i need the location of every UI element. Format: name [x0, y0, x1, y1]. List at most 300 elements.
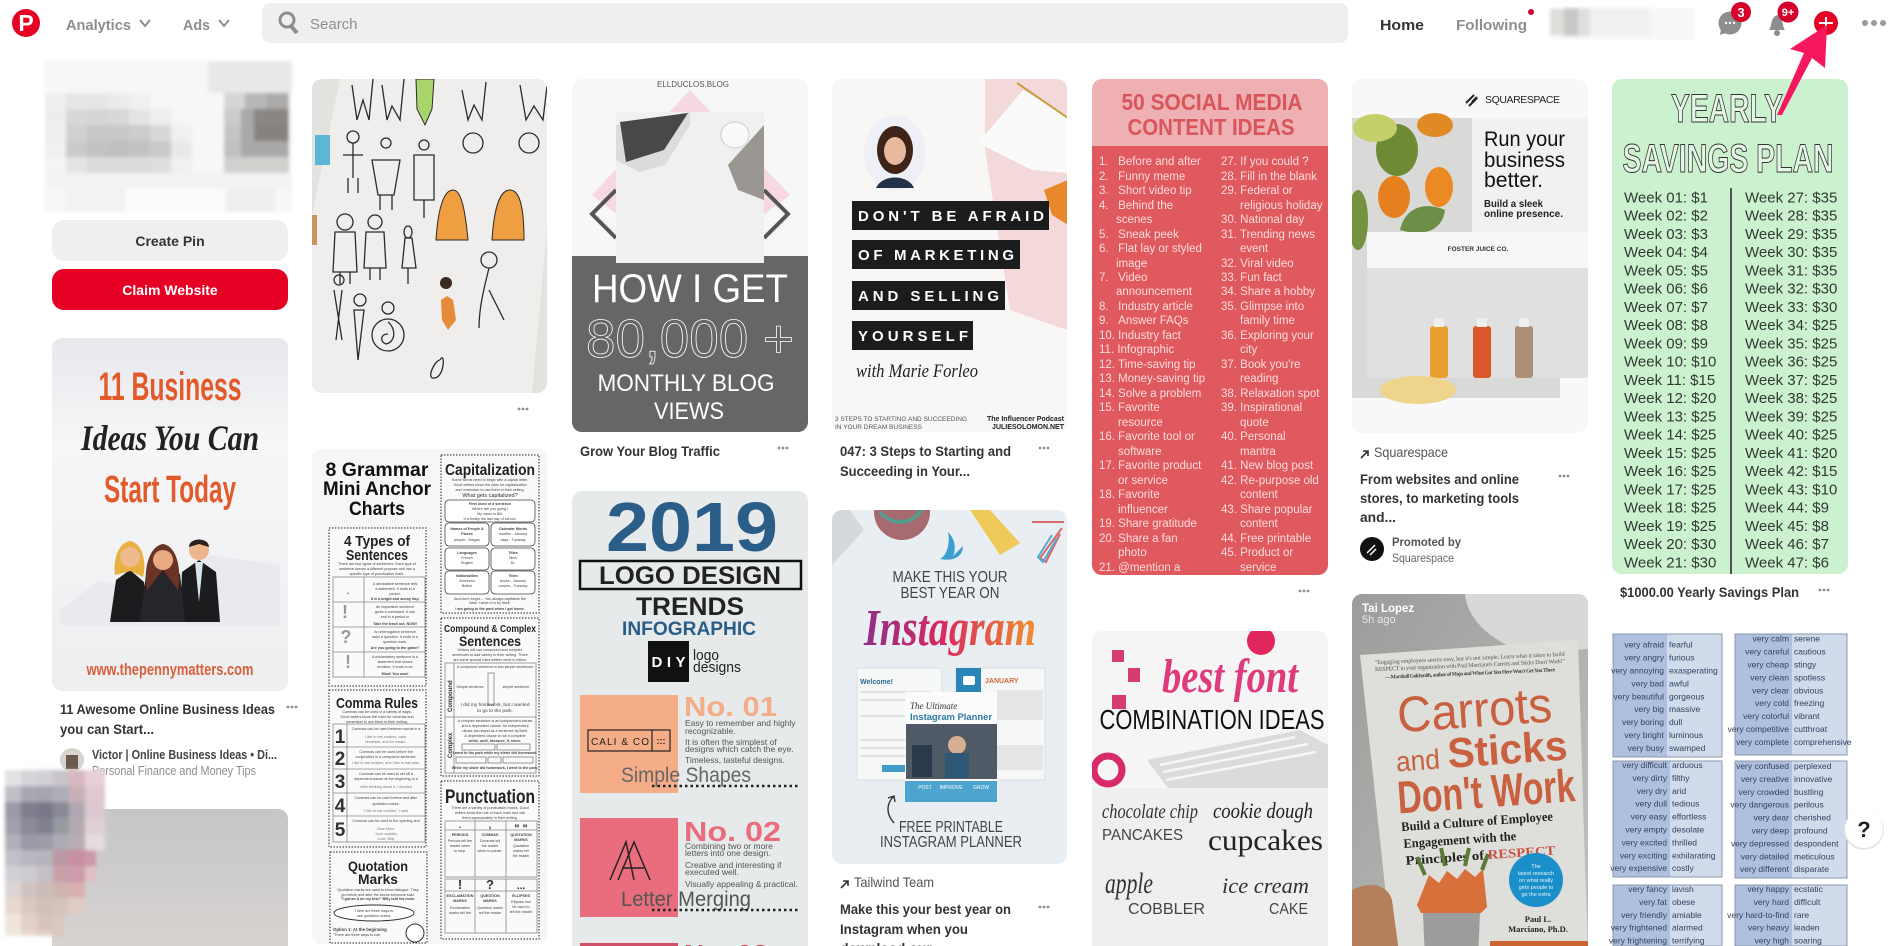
table C: very dry: [1637, 786, 1668, 796]
url text: www.thepennymatters.com: [86, 660, 253, 679]
table D: very deep: [1752, 826, 1789, 836]
chart: Compound and Complex Sentences: Complex: [448, 732, 454, 758]
chart: 4 Types of Sentences: Wow! You won!: [381, 672, 409, 676]
chart: Punctuation: !: [458, 877, 462, 892]
chart: Compound and Complex Sentences: sentences to add variety to their writing. There: [452, 653, 528, 657]
chart: Punctuation: Quotation: [513, 844, 529, 848]
more dots: [1299, 590, 1309, 592]
list: left column: 5. Sneak peek: [1099, 229, 1179, 241]
chart: Quotation Marks: Marks: [358, 871, 398, 887]
table F: very hard-to-find: [1727, 910, 1789, 920]
table: weeks 1 to 21: Week 12: $20: [1624, 390, 1716, 407]
table A: very busy: [1628, 743, 1665, 753]
list: right column: 39. Inspirational: [1221, 402, 1302, 414]
chart: Punctuation: to stop.: [454, 849, 466, 853]
source label: ELLDUCLOS.BLOG: [657, 80, 729, 89]
ad headline: Run your: [1484, 128, 1565, 151]
chart: Comma Rules: 4: [335, 796, 346, 817]
planner sheets: The Ultimate: [910, 701, 957, 711]
more dots: [1039, 906, 1049, 908]
table B: very competitive: [1728, 724, 1789, 734]
author: Marciano, Ph.D.: [1508, 924, 1568, 934]
table: weeks 1 to 21: Week 18: $25: [1624, 500, 1716, 517]
list: left column: 15. Favorite: [1099, 402, 1160, 414]
table: weeks 1 to 21: Week 11: $15: [1624, 372, 1715, 389]
planner sheets: IMPROVE: [939, 785, 963, 791]
author: Paul L.: [1525, 914, 1551, 924]
list: left column: influencer: [1118, 504, 1168, 516]
trend 01: simple shapes: Timeless, tasteful designs.: [685, 755, 785, 765]
list: right column: quote: [1240, 417, 1269, 429]
planner sheets: Instagram Planner: [910, 712, 993, 722]
chart: Capitalization: days - Tuesday: [500, 538, 526, 542]
table D: bustling: [1794, 787, 1824, 797]
table B: very clean: [1750, 672, 1789, 682]
list: left column: software: [1118, 446, 1161, 458]
chart: Punctuation: Punctuation: [445, 787, 535, 808]
title labels: OF MARKETING: [858, 247, 1014, 264]
table: weeks 27 to 47: [1745, 190, 1837, 572]
book subtitle: Build a Culture of Employee: [1401, 809, 1554, 834]
list: right column: event: [1240, 243, 1269, 255]
blurb: [1375, 652, 1566, 681]
trend 01: simple shapes: CALI & CO: [591, 737, 649, 748]
table B: cautious: [1794, 647, 1826, 657]
heading: monthly blog views: [599, 374, 773, 419]
table: weeks 1 to 21: Week 21: $30: [1624, 554, 1716, 572]
table E: obese: [1672, 897, 1695, 907]
table C: desolate: [1672, 824, 1704, 834]
table: weeks 1 to 21: Week 04: $4: [1624, 244, 1708, 261]
table: weeks 1 to 21: Week 07: $7: [1624, 299, 1708, 316]
chart: Capitalization: And don't forget.... You always capitalize the: [454, 597, 526, 601]
chart: Punctuation: ,: [489, 820, 491, 830]
list: right column: 38. Relaxation spot: [1221, 388, 1320, 400]
pin title: you can Start...: [60, 721, 154, 737]
list: right column: 43. Share popular: [1221, 504, 1313, 516]
trend 02: letter merging: Creative and interesting if: [685, 860, 782, 870]
chart: Capitalization: French: [461, 556, 473, 560]
chart: Comma Rules: "I like to eat cookies," I said.: [363, 809, 409, 813]
heading: Ideas You Can: Ideas You Can: [80, 418, 259, 458]
pin: vocabulary very words: [1609, 634, 1852, 946]
table E: very friendly: [1621, 910, 1668, 920]
chart: Comma Rules: After thinking about it, I decided: [360, 785, 412, 789]
chart: Quotation Marks: use quotation marks.: [357, 914, 391, 918]
trend 01: simple shapes: :::: [656, 736, 666, 746]
chart: Comma Rules: 3: [335, 772, 345, 793]
chart: Capitalization: Some words need to begin with a capital letter.: [452, 478, 528, 482]
icon: add button: [1814, 11, 1838, 35]
pin: gray photo: [52, 809, 288, 946]
table A: very big: [1634, 704, 1664, 714]
blurb: "Engaging employees seems easy, but it's not simple. Learn what it takes to build: [1375, 652, 1565, 666]
chart: Punctuation: [441, 781, 539, 939]
chart: Compound and Complex Sentences: Simple sentence: [456, 685, 484, 689]
chart: Compound and Complex Sentences: Compound: [448, 680, 454, 712]
pin title: Instagram when you: [840, 921, 968, 937]
pin: grammar anchor charts: [312, 449, 547, 944]
heading: 8 Grammar Mini Anchor Charts: Charts: [349, 499, 405, 520]
list: left column: 10. Industry fact: [1099, 330, 1182, 342]
heading: combination ideas: COMBINATION IDEAS: [1100, 704, 1324, 735]
table: weeks 1 to 21: Week 20: $30: [1624, 536, 1716, 553]
heading: Instagram: Instagram: [863, 600, 1036, 657]
pin: whiteboard stick figures: [312, 79, 547, 393]
planner sheets: Welcome!: [860, 679, 893, 686]
table: weeks 27 to 47: Week 30: $35: [1745, 244, 1837, 261]
list: left column: 9. Answer FAQs: [1099, 315, 1189, 327]
promoted by: [1360, 535, 1461, 565]
chart: Compound and Complex Sentences: and a dependent clause. An independent: [461, 724, 529, 728]
chart: Compound and Complex Sentences: While my sister did homework, I went to the park.: [452, 766, 538, 770]
table E: very frightening: [1609, 936, 1667, 946]
pin: Carrots and Sticks book: [1352, 594, 1588, 946]
table B: comprehensive: [1794, 737, 1852, 747]
Following link: Following: [1456, 17, 1527, 34]
list: left column: resource: [1118, 417, 1163, 429]
chart: Capitalization: First word of a sentence: [469, 502, 511, 506]
heading: how I get: HOW I GET: [592, 267, 788, 311]
chart: Punctuation: Commas tell: [480, 839, 500, 843]
list: left column: [1099, 156, 1205, 574]
table: weeks 27 to 47: Week 42: $15: [1745, 463, 1837, 480]
table: weeks 27 to 47: Week 46: $7: [1745, 536, 1829, 553]
pin: don't be afraid of marketing podcast: [832, 79, 1068, 432]
chart: Capitalization: Calendar Words: [499, 527, 527, 531]
book title: Carrots: [1395, 677, 1554, 743]
table: weeks 27 to 47: Week 31: $35: [1745, 262, 1837, 280]
caption: free printable planner: [881, 821, 1022, 847]
table C: tedious: [1672, 799, 1699, 809]
table: weeks 1 to 21: Week 14: $25: [1624, 427, 1716, 444]
table F: soaring: [1794, 936, 1822, 946]
chart: Compound and Complex Sentences: Compound & Complex: [444, 623, 536, 635]
table A: awful: [1669, 678, 1689, 688]
chart: Quotation Marks: "I got an A on my test!" Billy told his mom.: [341, 897, 415, 901]
research badge: gets people to: [1519, 885, 1553, 891]
trend 02: letter merging: Combining two or more: [685, 841, 773, 851]
pin title: Grow Your Blog Traffic: [580, 443, 720, 459]
chart: Capitalization: Names of People &: [450, 527, 484, 531]
logo: DIY logo designs: [648, 641, 741, 682]
table: weeks 27 to 47: Week 47: $6: [1745, 554, 1829, 572]
chart: Punctuation: MARKS: [514, 838, 528, 842]
icon: notifications with badge: 9+: [1782, 7, 1794, 19]
pin: 50 social media content ideas: [1092, 79, 1328, 575]
font samples: [1102, 798, 1323, 918]
author: [1508, 914, 1568, 934]
table: weeks 27 to 47: Week 44: $9: [1745, 500, 1829, 517]
table D: profound: [1794, 826, 1828, 836]
trend 01: simple shapes: Simple Shapes: [621, 764, 751, 787]
logo: DIY logo designs: DIY: [652, 654, 686, 671]
panel: column 5: [1092, 79, 1328, 946]
pin title: $1000.00 Yearly Savings Plan: [1620, 584, 1799, 600]
chart: Comma Rules: 1: [335, 727, 346, 748]
table: weeks 1 to 21: Week 02: $2: [1624, 208, 1708, 225]
panel: column 3: [572, 79, 808, 946]
list: right column: reading: [1240, 373, 1278, 385]
list: right column: 31. Trending news: [1221, 229, 1315, 241]
list: left column: 2. Funny meme: [1099, 171, 1185, 183]
website card: FOSTER JUICE CO.: [1448, 246, 1509, 253]
title labels: [852, 201, 1049, 350]
table F: very high: [1754, 936, 1789, 946]
trend 02: letter merging: letters into one design.: [685, 848, 771, 858]
podcast footer: IN YOUR DREAM BUSINESS: [835, 424, 923, 431]
table A: swamped: [1669, 743, 1706, 753]
table: weeks 27 to 47: Week 36: $25: [1745, 354, 1837, 371]
chart: Punctuation: QUOTATION: [510, 833, 532, 837]
research badge: on what really: [1519, 878, 1553, 884]
Ads menu: Ads: [183, 17, 210, 34]
pin title: Make this your best year on: [840, 901, 1011, 917]
heading: trends infographic: TRENDS: [636, 593, 744, 621]
table A: luminous: [1669, 730, 1703, 740]
chart: Comma Rules: I love cookies.: [374, 832, 398, 836]
list: right column: mantra: [1240, 446, 1276, 458]
podcast footer: JULIESOLOMON.NET: [992, 424, 1065, 431]
table: weeks 1 to 21: Week 03: $3: [1624, 226, 1708, 243]
list: right column: 45. Product or: [1221, 547, 1293, 559]
Create Pin button: Create Pin: [135, 233, 205, 249]
pin: yearly savings plan: [1612, 79, 1848, 574]
list: left column: 20. Share a fan: [1099, 533, 1178, 545]
table B: spotless: [1794, 672, 1825, 682]
table A: massive: [1669, 704, 1700, 714]
logo: DIY logo designs: logo: [693, 647, 719, 664]
pin title: [60, 701, 275, 737]
heading: CONTENT IDEAS: [1128, 114, 1294, 140]
list: left column: 7. Video: [1099, 272, 1147, 284]
help button: [1844, 810, 1884, 850]
image: keyboard and tape: [1094, 730, 1328, 788]
chart: Capitalization: Miss: [509, 556, 517, 560]
table C: costly: [1672, 863, 1694, 873]
ad headline: [1484, 128, 1565, 220]
book title: Don't Work: [1396, 759, 1577, 823]
chart: Punctuation: Ellipses can: [511, 900, 531, 904]
ad headline: online presence.: [1484, 208, 1563, 220]
pin title: stores, to marketing tools: [1360, 490, 1519, 506]
table D: cherished: [1794, 813, 1831, 823]
heading: 80,000 +: 80,000 +: [586, 309, 794, 369]
list: right column: 40. Personal: [1221, 431, 1286, 443]
research badge: go the extra: [1521, 892, 1551, 898]
trend 01: simple shapes: [580, 691, 799, 793]
chart: Comma Rules: Love, Billy: [378, 837, 395, 841]
title labels: AND SELLING: [858, 288, 999, 305]
chart: Comma Rules: Commas can be used in the opening and: [352, 819, 420, 823]
table: weeks 1 to 21: Week 13: $25: [1624, 408, 1716, 426]
list: right column: [1221, 156, 1323, 574]
heading: logo design: LOGO DESIGN: [599, 562, 781, 590]
chart: Punctuation: the reader: [513, 854, 530, 858]
list: left column: scenes: [1116, 214, 1153, 226]
table A: gorgeous: [1669, 691, 1704, 701]
chart: Capitalization: My name is Bill.: [477, 512, 503, 516]
heading: trends infographic: [623, 597, 756, 635]
title labels: DON'T BE AFRAID: [858, 208, 1044, 225]
list: right column: service: [1240, 562, 1276, 574]
pin: best year on Instagram: [832, 484, 1067, 864]
pin title: Succeeding in Your...: [840, 463, 970, 479]
chart: Punctuation: Question marks: [477, 906, 503, 910]
list: left column: 6. Flat lay or styled: [1099, 243, 1202, 255]
list: left column: 18. Favorite: [1099, 489, 1160, 501]
chart: 4 Types of Sentences: end in a period or: [381, 615, 410, 619]
pinner avatar and name: Personal Finance and Money Tips: [92, 763, 256, 778]
heading: make this your best year on: BEST YEAR ON: [900, 585, 1000, 602]
table: weeks 27 to 47: Week 27: $35: [1745, 190, 1837, 206]
table F: [1727, 884, 1847, 946]
table A: very annoying: [1611, 666, 1664, 676]
planner sheets: POST: [918, 785, 932, 791]
chart: 4 Types of Sentences: question mark.: [383, 640, 407, 644]
caption: free printable planner: FREE PRINTABLE: [899, 819, 1003, 836]
table B: cutthroat: [1794, 724, 1828, 734]
chart: Capitalization: Places: [461, 532, 473, 536]
table D: [1730, 761, 1847, 878]
chart: Capitalization: months - January: [499, 532, 527, 536]
planner sheets: GROW: [973, 785, 989, 791]
chart: 4 Types of Sentences: An interrogative sentence: [374, 630, 416, 634]
list: left column: 12. Time-saving tip: [1099, 359, 1196, 371]
author signature: with Marie Forleo: [856, 361, 978, 382]
table A: [1611, 634, 1722, 757]
table D: very detailed: [1741, 851, 1789, 861]
heading: [1122, 89, 1302, 140]
chart: Punctuation: Periods tell the: [448, 839, 472, 843]
pin: How I get 80,000 monthly blog views: [572, 79, 808, 432]
chart: Punctuation: tell the reader: [510, 910, 533, 914]
chart: Compound and Complex Sentences: are some special rules writers need to follow.: [453, 658, 527, 662]
font samples: COBBLER: [1128, 901, 1205, 918]
panel: column 7: [1609, 79, 1852, 946]
icon: more menu: [1862, 20, 1886, 26]
table B: obvious: [1794, 685, 1823, 695]
heading: 11 Business: 11 Business: [98, 365, 242, 409]
table: weeks 1 to 21: Week 16: $25: [1624, 463, 1716, 480]
table C: thrilled: [1672, 837, 1697, 847]
table C: very excited: [1622, 837, 1667, 847]
list: left column: 8. Industry article: [1099, 301, 1193, 313]
trend 01: simple shapes: It is often the simplest of: [685, 737, 777, 747]
table F: ecstatic: [1794, 884, 1824, 894]
table E: very fat: [1639, 897, 1668, 907]
chart: Punctuation: EXCLAMATION: [447, 894, 474, 898]
table F: very heavy: [1748, 923, 1790, 933]
book title: [1390, 675, 1577, 823]
table C: exhilarating: [1672, 850, 1716, 860]
table: weeks 27 to 47: Week 40: $25: [1745, 427, 1837, 444]
Analytics menu: Analytics: [66, 17, 131, 34]
chart: 4 Types of Sentences: !: [342, 602, 348, 622]
table B: very careful: [1745, 647, 1789, 657]
list: right column: 37. Book you're: [1221, 359, 1301, 371]
list: left column: 16. Favorite tool or: [1099, 431, 1195, 443]
promoted by: Squarespace: [1392, 551, 1454, 565]
table: weeks 1 to 21: Week 06: $6: [1624, 281, 1708, 298]
pin: Squarespace ad: [1348, 79, 1588, 433]
icon: notifications with badge: [1769, 2, 1798, 36]
table: weeks 27 to 47: Week 35: $25: [1745, 336, 1837, 352]
table: weeks 27 to 47: Week 28: $35: [1745, 208, 1837, 225]
list: right column: religious holiday: [1240, 200, 1323, 212]
chart: 4 Types of Sentences: A declarative sentence tells: [373, 582, 417, 586]
table: weeks 27 to 47: Week 43: $10: [1745, 482, 1837, 498]
table E: alarmed: [1672, 923, 1703, 933]
list: right column: family time: [1240, 315, 1295, 327]
table D: very dear: [1754, 813, 1789, 823]
list: left column: 19. Share gratitude: [1099, 518, 1197, 530]
table B: freezing: [1794, 698, 1825, 708]
chart: Capitalization: movies - Tuesday: [499, 584, 528, 588]
pin title: 11 Awesome Online Business Ideas: [60, 701, 275, 717]
table: weeks 27 to 47: Week 39: $25: [1745, 408, 1837, 426]
chart: Capitalization: books - January: [500, 579, 526, 583]
list: right column: 32. Viral video: [1221, 258, 1294, 270]
trend 02: letter merging: Visually appealing & practical.: [685, 879, 798, 889]
chart: Capitalization: Titles: [508, 551, 518, 555]
table C: very easy: [1631, 812, 1668, 822]
table D: disparate: [1794, 864, 1829, 874]
Claim Website button: Claim Website: [122, 282, 218, 298]
heading: 8 Grammar Mini Anchor Charts: 8 Grammar: [326, 460, 429, 481]
planner sheets: [857, 668, 1045, 802]
heading: monthly blog views: MONTHLY BLOG: [598, 370, 774, 397]
chart: 4 Types of Sentences: Take the trash out. NOW!: [373, 622, 417, 626]
chart: Punctuation: ELLIPSES: [512, 894, 530, 898]
chart: Punctuation: PERIODS: [452, 833, 469, 837]
story caption: [1362, 603, 1414, 626]
table: weeks 27 to 47: Week 32: $30: [1745, 281, 1837, 298]
chart: Quotation Marks: go before and after the words someone said.: [341, 893, 415, 897]
chart: Punctuation: COMMAS: [482, 833, 499, 837]
research badge: The: [1531, 864, 1541, 870]
trend 02: letter merging: executed well.: [685, 867, 739, 877]
list: left column: 1. Before and after: [1099, 156, 1201, 168]
table: weeks 27 to 47: Week 29: $35: [1745, 226, 1837, 243]
blurred profile image: [45, 61, 292, 212]
chart: Compound and Complex Sentences: clause can stand as a sentence by itself.: [462, 729, 528, 733]
trend 01: simple shapes: designs which catch the eye.: [685, 744, 794, 754]
table A: very boring: [1622, 717, 1664, 727]
pin title: 047: 3 Steps to Starting and: [840, 443, 1011, 459]
chart: Punctuation: be used to: [512, 905, 530, 909]
chart: 4 Types of Sentences: It is a bright and sunny day.: [371, 597, 419, 601]
chart: Compound and Complex Sentences: Sentences: [459, 633, 521, 649]
table B: very colorful: [1743, 711, 1789, 721]
table: weeks 1 to 21: Week 05: $5: [1624, 262, 1708, 280]
chart: Comma Rules: 2: [335, 749, 345, 770]
caption: free printable planner: INSTAGRAM PLANNER: [880, 834, 1022, 851]
ad headline: better.: [1484, 169, 1543, 192]
research badge: [1509, 853, 1563, 907]
chart: Punctuation: reader when: [450, 844, 470, 848]
chart: Punctuation: There are a variety of punctuation marks. Good: [451, 806, 529, 810]
logo: Squarespace: SQUARESPACE: [1485, 94, 1560, 106]
trend 03: cropped: [580, 943, 765, 946]
table: weeks 1 to 21: Week 10: $10: [1624, 354, 1716, 371]
title labels: YOURSELF: [858, 328, 968, 345]
source: Squarespace: Squarespace: [1374, 444, 1448, 460]
table D: perplexed: [1794, 761, 1832, 771]
search bar: Search: [310, 16, 358, 33]
chart: Compound and Complex Sentences: while, until, because, if, since.: [468, 739, 521, 743]
more dots: [1819, 589, 1829, 591]
